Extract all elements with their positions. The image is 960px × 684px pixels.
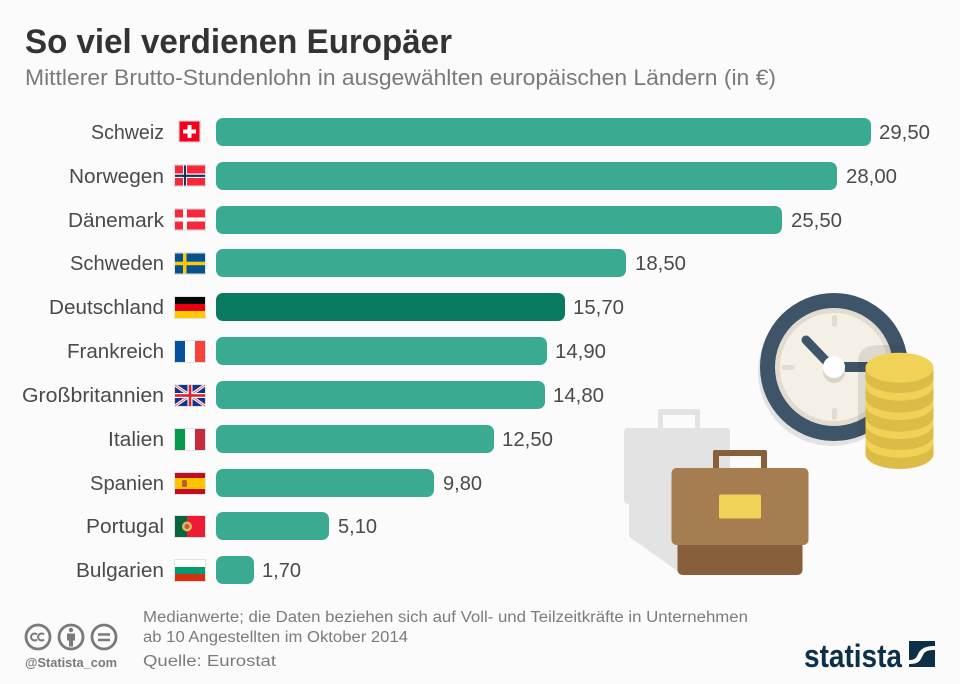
row: Deutschland [49,293,624,321]
row: Portugal: 5,10 [338,516,377,538]
handle: @Statista_com [25,656,117,670]
row: Frankreich: Frankreich [67,341,164,363]
row: Spanien: Spanien [90,473,164,495]
footnote line 2: ab 10 Angestellten im Oktober 2014 [143,629,408,646]
row: Großbritannien [22,381,604,409]
row: Dänemark: Dänemark [68,210,165,232]
row: Italien: 12,50 [502,429,553,451]
row: Schweiz [91,118,930,146]
illustration: briefcase shadow [624,409,730,573]
row: Norwegen [69,162,897,190]
row: Portugal [86,512,377,540]
icon: coins [866,353,934,469]
row: Dänemark [68,206,842,234]
row: Norwegen: Norwegen [69,166,164,188]
row: Schweden [70,249,686,277]
row: Italien: Italien [108,429,164,451]
row: Italien [108,425,553,453]
logo: statista: statista [804,638,902,674]
row: Schweiz: 29,50 [879,122,930,144]
row: Bulgarien: Bulgarien [76,560,164,582]
title: So viel verdienen Europäer [25,23,452,61]
row: Deutschland: Deutschland [49,297,164,319]
row: Portugal: Portugal [86,516,164,538]
icons: creative commons [26,625,116,649]
footnote: Medianwerte; die Daten beziehen sich auf Voll- und Teilzeitkräfte in Unternehmen [143,609,748,626]
subtitle: Mittlerer Brutto-Stundenlohn in ausgewählten europäischen Ländern (in €) [25,65,776,90]
illustration: briefcase [672,450,808,575]
row: Bulgarien: 1,70 [262,560,301,582]
row: Großbritannien: Großbritannien [22,385,164,407]
row: Dänemark: 25,50 [791,210,842,232]
row: Schweden: 18,50 [635,253,686,275]
row: Spanien [90,469,482,497]
row: Schweiz: Schweiz [91,122,164,144]
row: Schweden: Schweden [70,253,164,275]
row: Deutschland: 15,70 [573,297,624,319]
row: Frankreich: 14,90 [555,341,606,363]
row: Norwegen: 28,00 [846,166,897,188]
row: Großbritannien: 14,80 [553,385,604,407]
row: Bulgarien [76,556,301,584]
row: Spanien: 9,80 [443,473,482,495]
illustration: clock and coins [758,293,934,469]
row: Frankreich [67,337,606,365]
bar chart [22,118,930,584]
source: Quelle: Eurostat [143,653,277,670]
